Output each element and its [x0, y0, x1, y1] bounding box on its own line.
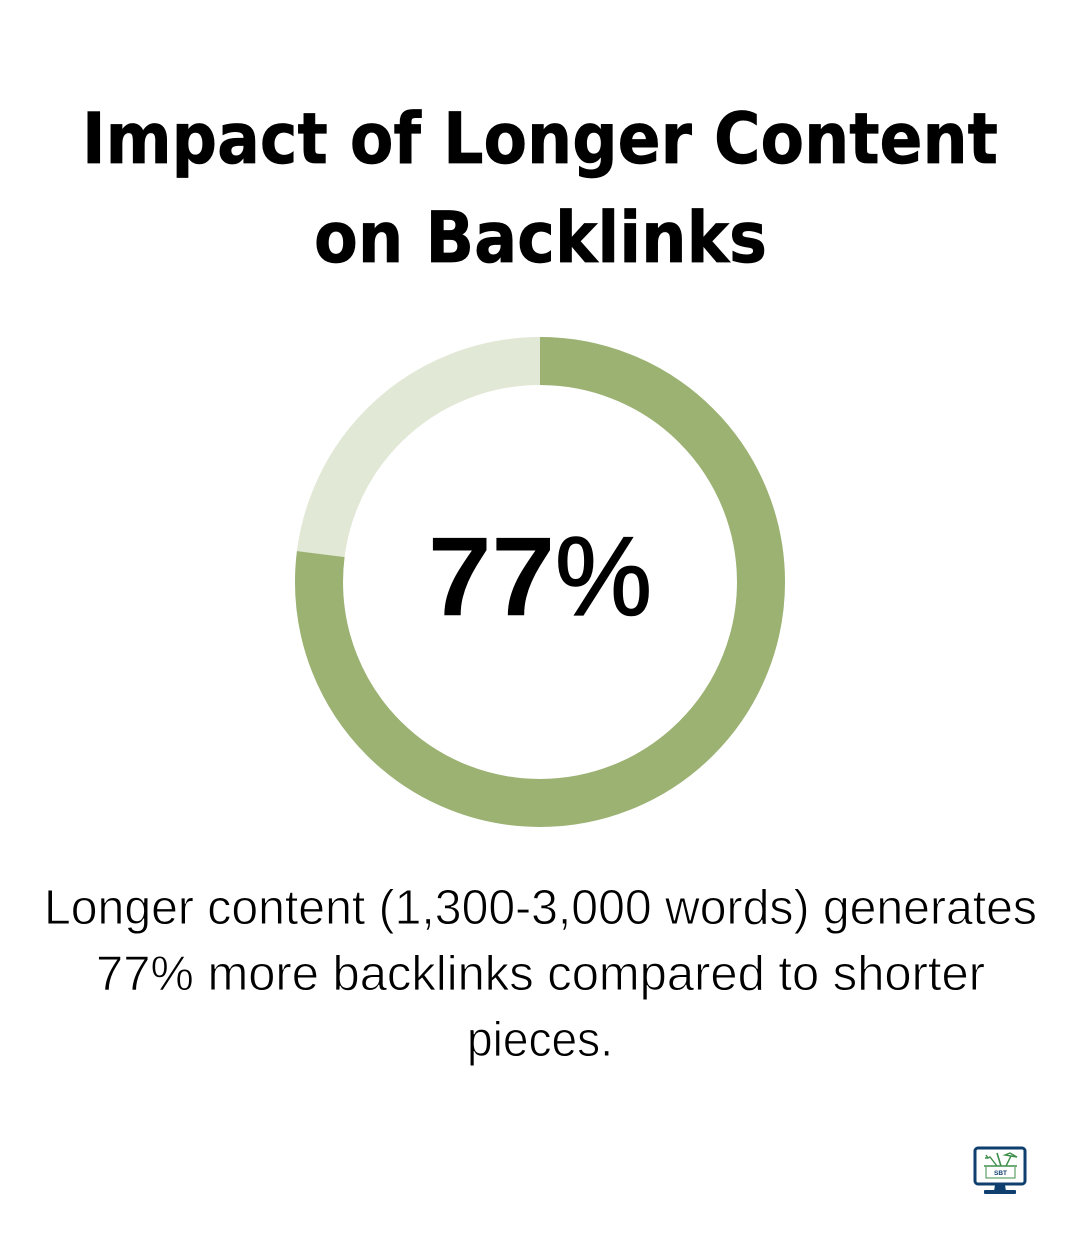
description text: 77% more backlinks compared to shorter	[96, 947, 985, 1001]
description text: Longer content (1,300-3,000 words) generates	[44, 881, 1037, 935]
title: Impact of Longer Content	[82, 98, 998, 180]
donut value arc	[319, 361, 761, 803]
donut chart: 77%	[319, 361, 761, 803]
icon: monitor with toolbox logo: SBT	[994, 1170, 1007, 1177]
title: on Backlinks	[314, 197, 767, 279]
description text: pieces.	[467, 1013, 613, 1067]
title	[82, 98, 998, 279]
donut track	[319, 361, 761, 803]
center value: 77	[428, 514, 555, 639]
center value	[428, 514, 652, 639]
description text	[44, 881, 1037, 1067]
center value: %	[555, 514, 652, 639]
icon: monitor with toolbox logo	[975, 1148, 1025, 1194]
